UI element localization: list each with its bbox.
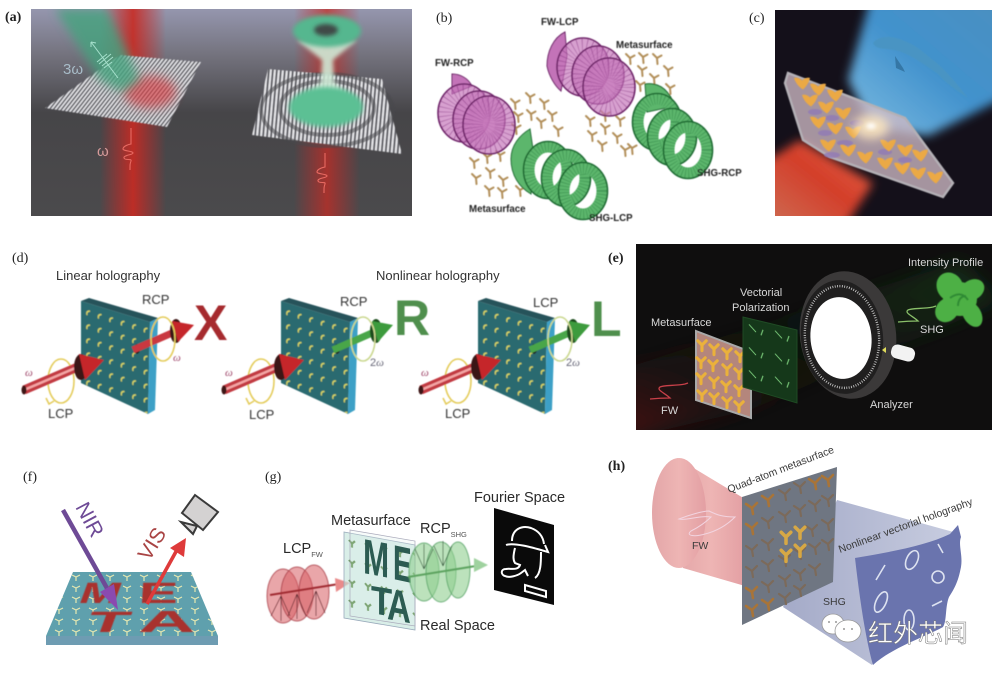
- omega label: ω: [225, 367, 233, 379]
- panel label: f: (f): [23, 470, 37, 485]
- watermark: WeChat icon: [822, 614, 861, 642]
- focus glow: [853, 115, 889, 139]
- label: NIR: NIR: [71, 499, 108, 541]
- labels: Vectorial: [740, 287, 782, 299]
- camera: [181, 495, 218, 534]
- right red beam: [294, 9, 360, 216]
- vectorial polarization sheet: [743, 317, 797, 403]
- helix labels: [435, 17, 742, 224]
- beam glow: [636, 261, 992, 430]
- SHG pulse: [898, 306, 936, 322]
- omega label: ω: [421, 367, 429, 379]
- panel: third harmonic generation on gratings: [31, 9, 412, 216]
- panel label: d: (d): [12, 251, 29, 266]
- metasurface plate: [478, 298, 555, 414]
- labels: Metasurface: [331, 513, 411, 529]
- helix labels: Metasurface: [616, 40, 673, 51]
- labels: RCP: [142, 292, 169, 307]
- dolphin fin: [895, 56, 905, 72]
- plate side: [46, 636, 218, 645]
- analyzer dial: [800, 271, 916, 399]
- letters META: [75, 576, 197, 639]
- red helix: [267, 565, 350, 623]
- left grating: [45, 55, 201, 127]
- hologram letter L: L: [591, 291, 622, 347]
- left green beam: [55, 9, 140, 92]
- dolphin: [874, 38, 964, 94]
- panel label: g: (g): [265, 470, 282, 485]
- labels: FW: [661, 405, 679, 417]
- heading: linear holography: Linear holography: [56, 268, 161, 283]
- panel: META metasurface NIR to VIS: [46, 495, 218, 645]
- plate top: [46, 572, 218, 636]
- panel label: h: (h): [608, 459, 625, 474]
- labels: SHG: [920, 324, 944, 336]
- labels: LCP: [533, 295, 558, 310]
- red pulse left: [123, 128, 133, 170]
- VIS arrow: [147, 538, 186, 604]
- watermark text: 红外芯闻: [868, 620, 968, 648]
- labels: RCP: [420, 521, 451, 537]
- SHG-RCP green helix: [632, 84, 712, 178]
- labels: Quad-atom metasurface: [726, 444, 836, 496]
- SHG label: SHG: [823, 596, 846, 608]
- letters META in slab: M: [363, 528, 389, 589]
- flower intensity profile: [934, 272, 985, 328]
- letters META: E: [138, 577, 179, 609]
- panel: vectorial polarization analyzer: [636, 244, 992, 430]
- SHG-LCP green helix: [511, 129, 608, 220]
- metasurface: [696, 331, 751, 418]
- labels: Analyzer: [870, 399, 913, 411]
- metasurface plate: [785, 73, 953, 197]
- labels: Polarization: [732, 302, 789, 314]
- golden atoms: [794, 78, 943, 184]
- panel: nonlinear holography L schematic: [418, 291, 622, 421]
- letters META in slab: [363, 528, 412, 633]
- input label: LCP: [445, 406, 470, 421]
- omega labels: [25, 352, 181, 379]
- panel: circular polarization second harmonic helices: [435, 17, 742, 224]
- input arrow: [418, 354, 501, 404]
- NIR arrow: [63, 510, 118, 610]
- output ring: [351, 317, 375, 361]
- output ring: [548, 317, 572, 361]
- hologram letter X: X: [194, 295, 227, 351]
- omega labels: ω: [173, 352, 181, 364]
- letters META in slab: T: [371, 577, 392, 625]
- FW-LCP purple helix: [547, 32, 635, 116]
- two omega label: 2ω: [566, 357, 580, 369]
- left grating red spot: [124, 76, 176, 108]
- label: 3 omega: 3ω: [63, 61, 83, 78]
- output arrow: [133, 319, 194, 354]
- central golden atoms: [781, 527, 805, 561]
- labels: LCP: [48, 406, 73, 421]
- pink FW beam cylinder: [652, 458, 745, 586]
- metasurface atoms: [470, 53, 674, 198]
- labels: FW: [311, 550, 324, 559]
- labels: Intensity Profile: [908, 257, 983, 269]
- nonlinear label: Nonlinear vectorial holography: [837, 496, 975, 556]
- helix labels: FW-LCP: [541, 17, 579, 28]
- right grating dark rings: [261, 74, 393, 146]
- panel: linear holography schematic: [22, 292, 227, 421]
- panel: metasurface dolphin hologram: [775, 10, 992, 216]
- output arrow: [333, 319, 393, 354]
- output arrow: [530, 319, 590, 354]
- labels: [283, 490, 565, 634]
- label: omega: ω: [97, 143, 109, 160]
- FW-RCP purple helix: [438, 74, 515, 154]
- hologram letter R: R: [394, 290, 430, 346]
- right grating: [252, 69, 402, 154]
- helix labels: FW-RCP: [435, 58, 474, 69]
- labels: SHG: [451, 530, 467, 539]
- Fourier space poster: [494, 508, 554, 605]
- labels: Fourier Space: [474, 490, 565, 506]
- FW label: FW: [692, 540, 708, 552]
- letters META: T: [82, 606, 135, 639]
- right green focused beam: [289, 15, 363, 127]
- labels: [651, 257, 983, 417]
- panel: META Fourier hologram: [267, 490, 565, 634]
- panel label: b: (b): [436, 11, 453, 26]
- labels: Real Space: [420, 618, 495, 634]
- two omega label: 2ω: [370, 357, 384, 369]
- letters META in slab: A: [387, 579, 411, 633]
- metasurface plate: [281, 298, 358, 414]
- panel label: a: (a): [5, 10, 22, 25]
- hologram screen: [855, 525, 961, 665]
- green helix: [408, 541, 488, 602]
- metasurface plate: [81, 298, 158, 414]
- letters META: A: [138, 604, 197, 639]
- panel label: e: (e): [608, 251, 624, 266]
- red pulse right: [317, 153, 327, 193]
- omega labels: ω: [25, 367, 33, 379]
- purple atom shadows: [808, 109, 912, 163]
- metasurface slab: [344, 530, 415, 630]
- labels: [48, 292, 169, 421]
- 3 omega pulse arrow: [91, 42, 118, 78]
- blue SHG beam: [783, 500, 957, 665]
- FW pulse: [650, 383, 688, 399]
- panel: nonlinear holography R schematic: [222, 290, 430, 422]
- input arrow: [22, 354, 104, 404]
- heading: nonlinear holography: Nonlinear holography: [376, 268, 500, 283]
- input arrow: [222, 354, 304, 404]
- panel: quad-atom metasurface vectorial holography: [652, 444, 975, 665]
- output ring: [151, 317, 175, 361]
- FW pulse: [679, 511, 735, 536]
- labels: Metasurface: [651, 317, 712, 329]
- labels: LCP: [283, 541, 311, 557]
- helix labels: Metasurface: [469, 204, 526, 215]
- left red beam: [100, 9, 166, 216]
- blue beam: [848, 0, 1000, 136]
- helix labels: SHG-LCP: [589, 213, 633, 224]
- letters META: M: [75, 576, 127, 609]
- red beam: [775, 134, 878, 216]
- metasurface plate: [742, 467, 837, 625]
- input label: LCP: [249, 407, 274, 422]
- letters META in slab: E: [393, 534, 412, 594]
- plate atoms: [46, 572, 218, 636]
- helix labels: SHG-RCP: [697, 168, 742, 179]
- labels: RCP: [340, 294, 367, 309]
- label: VIS: VIS: [134, 524, 171, 565]
- panel label: c: (c): [749, 11, 765, 26]
